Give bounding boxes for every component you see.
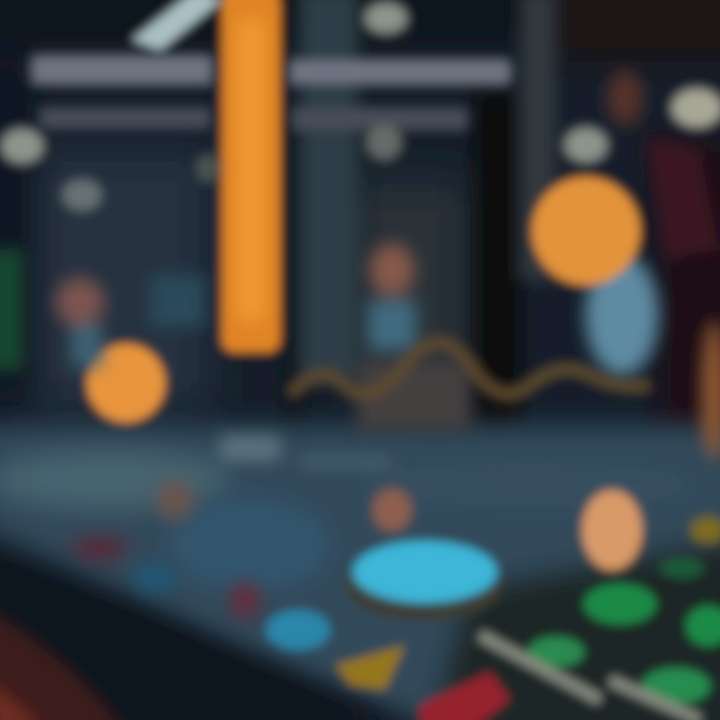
orange vertical bar xyxy=(222,0,280,352)
panel: bottom-right dark area xyxy=(430,540,720,720)
icon: yellow patch xyxy=(335,645,405,690)
figure: centre person xyxy=(358,244,470,430)
heading: blurred title line one xyxy=(32,56,510,84)
icon: orange tile right xyxy=(690,516,720,544)
panel: bottom-left dark edge xyxy=(0,550,390,720)
icon: red patch xyxy=(420,672,510,720)
small coloured tokens xyxy=(72,480,261,618)
panel: lower table band xyxy=(0,425,720,720)
icon: cyan patch xyxy=(266,610,330,650)
text block: blurred title line two xyxy=(40,108,467,130)
panel: dark column xyxy=(520,0,556,280)
icon: small orange circle xyxy=(87,344,165,422)
decorative light stripes xyxy=(480,635,700,720)
chart: wavy trend line xyxy=(290,342,650,395)
icon: pale streak top xyxy=(132,0,222,50)
figure: left person xyxy=(0,250,205,370)
icon: cyan disc xyxy=(346,541,502,620)
icons: green tiles xyxy=(528,558,720,704)
figure: right person xyxy=(586,70,720,460)
icon: peach glow xyxy=(582,490,642,570)
panel: grey column xyxy=(300,0,358,380)
icon: small peach glow xyxy=(372,488,412,532)
icon: large orange circle xyxy=(532,177,640,285)
icon: pale dots xyxy=(0,2,720,211)
